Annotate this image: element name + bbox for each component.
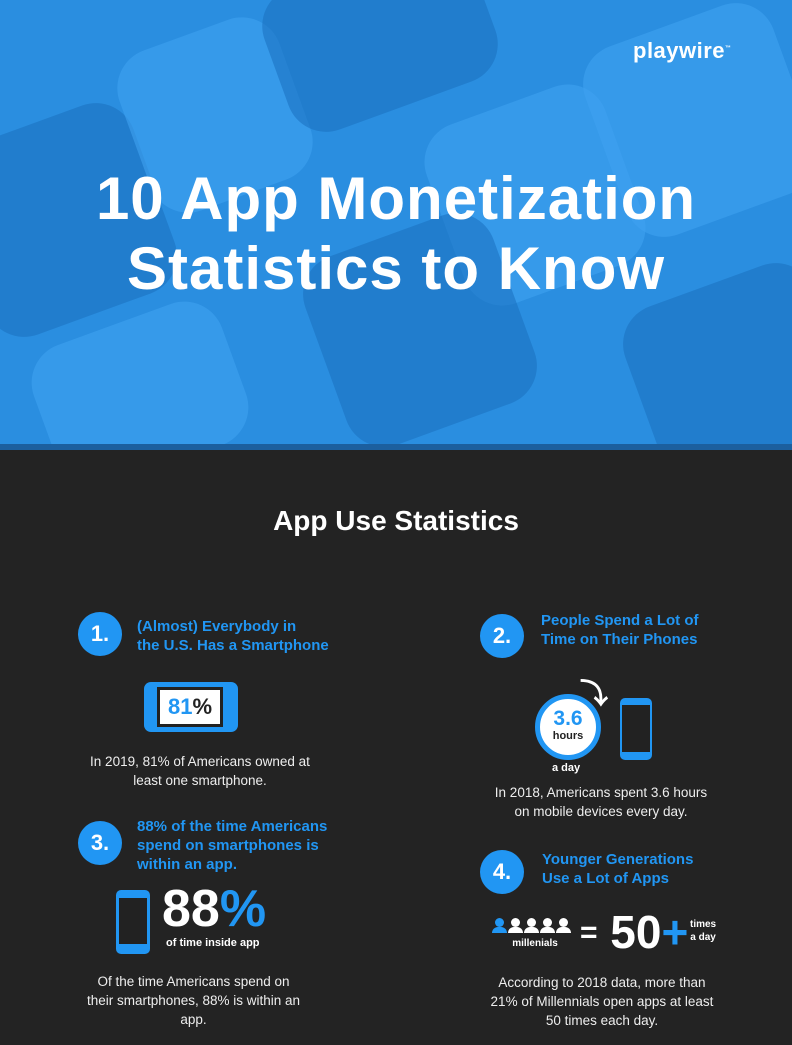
panel: stat 2: [480, 612, 707, 819]
logo: playwire: playwire™: [633, 38, 732, 63]
icon: phone 81%: [144, 682, 238, 732]
header banner: [0, 0, 792, 450]
section heading: App Use Statistics: [273, 505, 519, 536]
heading 2: People Spend a Lot of Time on Their Phones: [541, 612, 699, 648]
text 2: In 2018, Americans spent 3.6 hours on mobile devices every day.: [495, 785, 707, 819]
text 1: In 2019, 81% of Americans owned at least one smartphone.: [90, 754, 310, 788]
label times a day: [690, 919, 716, 943]
label times a day: times: [690, 919, 716, 930]
text 4: According to 2018 data, more than 21% of Millennials open apps at least 50 times each day.: [491, 975, 713, 1028]
heading 3: 88% of the time Americans spend on smartphones is within an app.: [137, 818, 327, 873]
icon: phone with apps: [116, 890, 150, 954]
title: 10 App Monetization: [96, 165, 696, 232]
big stat 88%: 88%: [162, 880, 266, 938]
number badge 3: [78, 821, 122, 865]
number badge 4: 4.: [493, 859, 511, 884]
number badge 1: [78, 612, 122, 656]
label of time inside app: of time inside app: [166, 937, 260, 949]
heading 1: the U.S. Has a Smartphone: [137, 637, 329, 654]
number badge 1: 1.: [91, 621, 109, 646]
number badge 3: 3.: [91, 830, 109, 855]
number badge 2: [480, 614, 524, 658]
icon: clock 3.6 hours: 3.6: [553, 707, 583, 730]
number badge 2: 2.: [493, 623, 511, 648]
icon: millenials: millenials: [512, 938, 558, 949]
title: Statistics to Know: [127, 235, 665, 302]
icon: clock 3.6 hours: [535, 694, 601, 760]
title: [96, 165, 696, 302]
equation 50+: = 50+: [580, 906, 688, 958]
heading 1: [137, 618, 329, 654]
number badge 4: [480, 850, 524, 894]
icon: phone 81%: 81%: [168, 694, 212, 719]
panel: stat 4: [480, 850, 716, 1028]
label times a day: a day: [690, 932, 716, 943]
panel: stat 1: [78, 612, 329, 788]
panel: stat 3: [78, 818, 327, 1027]
text 3: Of the time Americans spend on their smartphones, 88% is within an app.: [87, 974, 300, 1027]
label a day: a day: [552, 762, 580, 774]
heading 1: (Almost) Everybody in: [137, 618, 296, 635]
icon: phone: [620, 698, 652, 760]
heading 4: Younger Generations Use a Lot of Apps: [542, 851, 693, 887]
icon: clock 3.6 hours: hours: [553, 730, 583, 742]
arrow: ⤵: [580, 678, 608, 709]
